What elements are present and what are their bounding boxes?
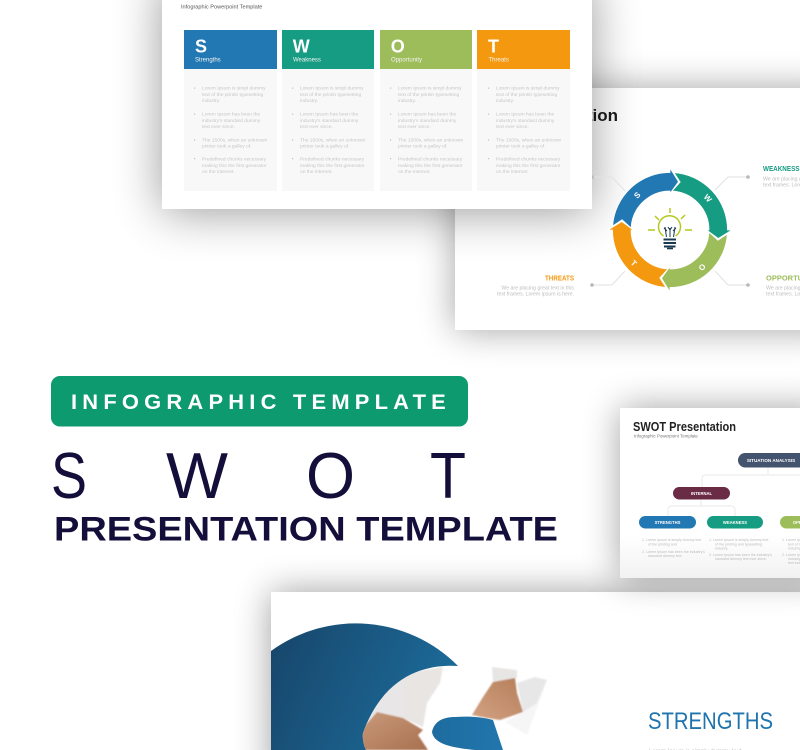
column: weakness: text of the printin typesetting xyxy=(300,92,361,98)
list: weakness: 1. Lorem Ipsum is simply dummy text xyxy=(709,538,768,542)
title: SWOT xyxy=(51,439,466,512)
column: opportunity: industry. xyxy=(398,98,416,104)
column: opportunity: O xyxy=(391,37,405,57)
column: strengths: text ever since. xyxy=(202,124,235,130)
title: SWOT: S xyxy=(51,439,87,512)
blue arc shape xyxy=(271,623,458,750)
subtitle: presentation template: PRESENTATION TEMPLATE xyxy=(54,510,558,548)
column: threats: text ever since. xyxy=(496,124,529,130)
subtitle: Infographic Powerpoint Template xyxy=(634,434,698,438)
node: situation analysis: SITUATION ANALYSIS xyxy=(747,458,795,463)
column: strengths: industry. xyxy=(202,98,220,104)
list: weakness: standard dummy text ever since. xyxy=(715,557,767,561)
column: threats: printer took a galley of. xyxy=(496,144,545,150)
letter W: W xyxy=(702,193,714,204)
connector lines xyxy=(592,177,748,285)
column: weakness: Lorem Ipsum is simpl dummy xyxy=(300,86,364,92)
column: threats xyxy=(477,30,570,191)
column: weakness: Weakness xyxy=(293,57,321,63)
arrow: opportunity xyxy=(661,232,727,292)
list: strengths xyxy=(642,538,705,558)
panel: strengths slide xyxy=(271,592,800,750)
cycle diagram xyxy=(608,168,732,292)
column: weakness: W xyxy=(293,37,310,57)
list: weakness xyxy=(709,538,772,561)
column: weakness: printer took a galley of. xyxy=(300,144,349,150)
label: opportunity xyxy=(766,274,800,298)
column: weakness xyxy=(282,30,374,191)
title: SWOT: O xyxy=(306,439,355,512)
list: weakness: 2. Lorem Ipsum has been the industry's xyxy=(709,553,772,557)
node: situation analysis xyxy=(738,453,800,468)
column: threats: industry's standard dummy xyxy=(496,118,555,124)
photo: handshake xyxy=(360,667,547,750)
column: opportunity: making this the first generator xyxy=(398,163,463,169)
label: threats: We are placing great text in this xyxy=(501,286,574,292)
column: threats: making this the first generator xyxy=(496,163,561,169)
connector dots xyxy=(590,175,750,287)
list: strengths: 1. Lorem Ipsum is simply dummy text xyxy=(642,538,701,542)
column: strengths: Predefined chunks necessary xyxy=(202,156,267,162)
column: opportunity xyxy=(380,30,472,191)
arrow: threats xyxy=(608,221,668,287)
column: strengths: The 1500s, when an unknown xyxy=(202,138,268,144)
column: threats: The 1500s, when an unknown xyxy=(496,138,562,144)
badge: infographic template: INFOGRAPHIC TEMPLATE xyxy=(71,391,451,414)
subtitle: Infographic Powerpoint Template xyxy=(181,4,262,10)
column: threats: industry. xyxy=(496,98,514,104)
badge: infographic template xyxy=(51,376,468,426)
column: threats: Lorem Ipsum is simpl dummy xyxy=(496,86,560,92)
icon: light bulb xyxy=(648,208,692,248)
label: weakness xyxy=(763,164,800,188)
column: strengths: Lorem Ipsum has been the xyxy=(202,112,260,118)
column: opportunity: The 1500s, when an unknown xyxy=(398,138,464,144)
title: SWOT: W xyxy=(166,439,229,512)
column: threats: text of the printin typesetting xyxy=(496,92,557,98)
column: weakness: on the internet. xyxy=(300,169,333,175)
panel: cycle slide xyxy=(162,0,800,330)
column: strengths: industry's standard dummy xyxy=(202,118,261,124)
column: strengths: Lorem Ipsum is simpl dummy xyxy=(202,86,266,92)
list: weakness: of the printing and typesetting xyxy=(715,542,762,546)
column: opportunity: Opportunity xyxy=(391,57,422,63)
label: threats xyxy=(497,274,574,298)
column: strengths: on the internet. xyxy=(202,169,235,175)
column: weakness: The 1500s, when an unknown xyxy=(300,138,366,144)
node: internal xyxy=(673,487,730,500)
arrow: strengths xyxy=(613,168,679,228)
letter O: O xyxy=(697,262,708,273)
column: opportunity: printer took a galley of. xyxy=(398,144,447,150)
title: SWOT Presentation xyxy=(459,106,618,125)
node: strengths: STRENGTHS xyxy=(655,520,681,525)
arrow: weakness xyxy=(672,173,732,239)
column: threats: on the internet. xyxy=(496,169,529,175)
column: strengths: making this the first generator xyxy=(202,163,267,169)
panel: four column SWOT slide xyxy=(162,0,592,209)
connector lines xyxy=(668,467,800,516)
column: weakness: text ever since. xyxy=(300,124,333,130)
column: threats: T xyxy=(488,37,499,57)
column: weakness: making this the first generator xyxy=(300,163,365,169)
title: SWOT Presentation xyxy=(633,420,736,434)
title: SWOT: T xyxy=(430,439,466,512)
list: strengths: of the printing and xyxy=(648,542,677,546)
heading: strengths: STRENGTHS xyxy=(648,708,773,735)
list: weakness: industry. xyxy=(715,546,728,550)
column: strengths: text of the printin typesetting xyxy=(202,92,263,98)
node: opportunity xyxy=(780,516,800,528)
node: internal: INTERNAL xyxy=(691,491,713,496)
column: weakness: industry. xyxy=(300,98,318,104)
label: threats: text frames. Lorem ipsum is here. xyxy=(497,292,574,298)
node: weakness xyxy=(707,516,763,528)
node: strengths xyxy=(639,516,696,528)
column: weakness: industry's standard dummy xyxy=(300,118,359,124)
column: strengths: printer took a galley of. xyxy=(202,144,251,150)
card shadow on cycle slide xyxy=(162,0,592,212)
column: threats: Predefined chunks necessary xyxy=(496,156,561,162)
column: strengths xyxy=(184,30,277,191)
column: threats: Threats xyxy=(488,57,509,63)
column: opportunity: text of the printin typesetting xyxy=(398,92,459,98)
panel: situation analysis slide xyxy=(620,408,800,578)
column: weakness: Lorem Ipsum has been the xyxy=(300,112,358,118)
column: opportunity: industry's standard dummy xyxy=(398,118,457,124)
column: opportunity: Predefined chunks necessary xyxy=(398,156,463,162)
column: strengths: Strengths xyxy=(195,57,221,63)
column: opportunity: Lorem Ipsum is simpl dummy xyxy=(398,86,462,92)
node: weakness: WEAKNESS xyxy=(723,520,747,525)
column: opportunity: on the internet. xyxy=(398,169,431,175)
list: strengths: 2. Lorem Ipsum has been the industry's xyxy=(642,550,705,554)
label: threats: THREATS xyxy=(545,274,574,282)
column: opportunity: Lorem Ipsum has been the xyxy=(398,112,456,118)
list: opportunity xyxy=(782,538,800,565)
column: weakness: Predefined chunks necessary xyxy=(300,156,365,162)
letter T: T xyxy=(629,258,639,268)
column: threats: Lorem Ipsum has been the xyxy=(496,112,554,118)
column: opportunity: text ever since. xyxy=(398,124,431,130)
column: strengths: S xyxy=(195,37,207,57)
list: strengths: standard dummy text xyxy=(648,554,682,558)
letter S: S xyxy=(632,190,643,200)
